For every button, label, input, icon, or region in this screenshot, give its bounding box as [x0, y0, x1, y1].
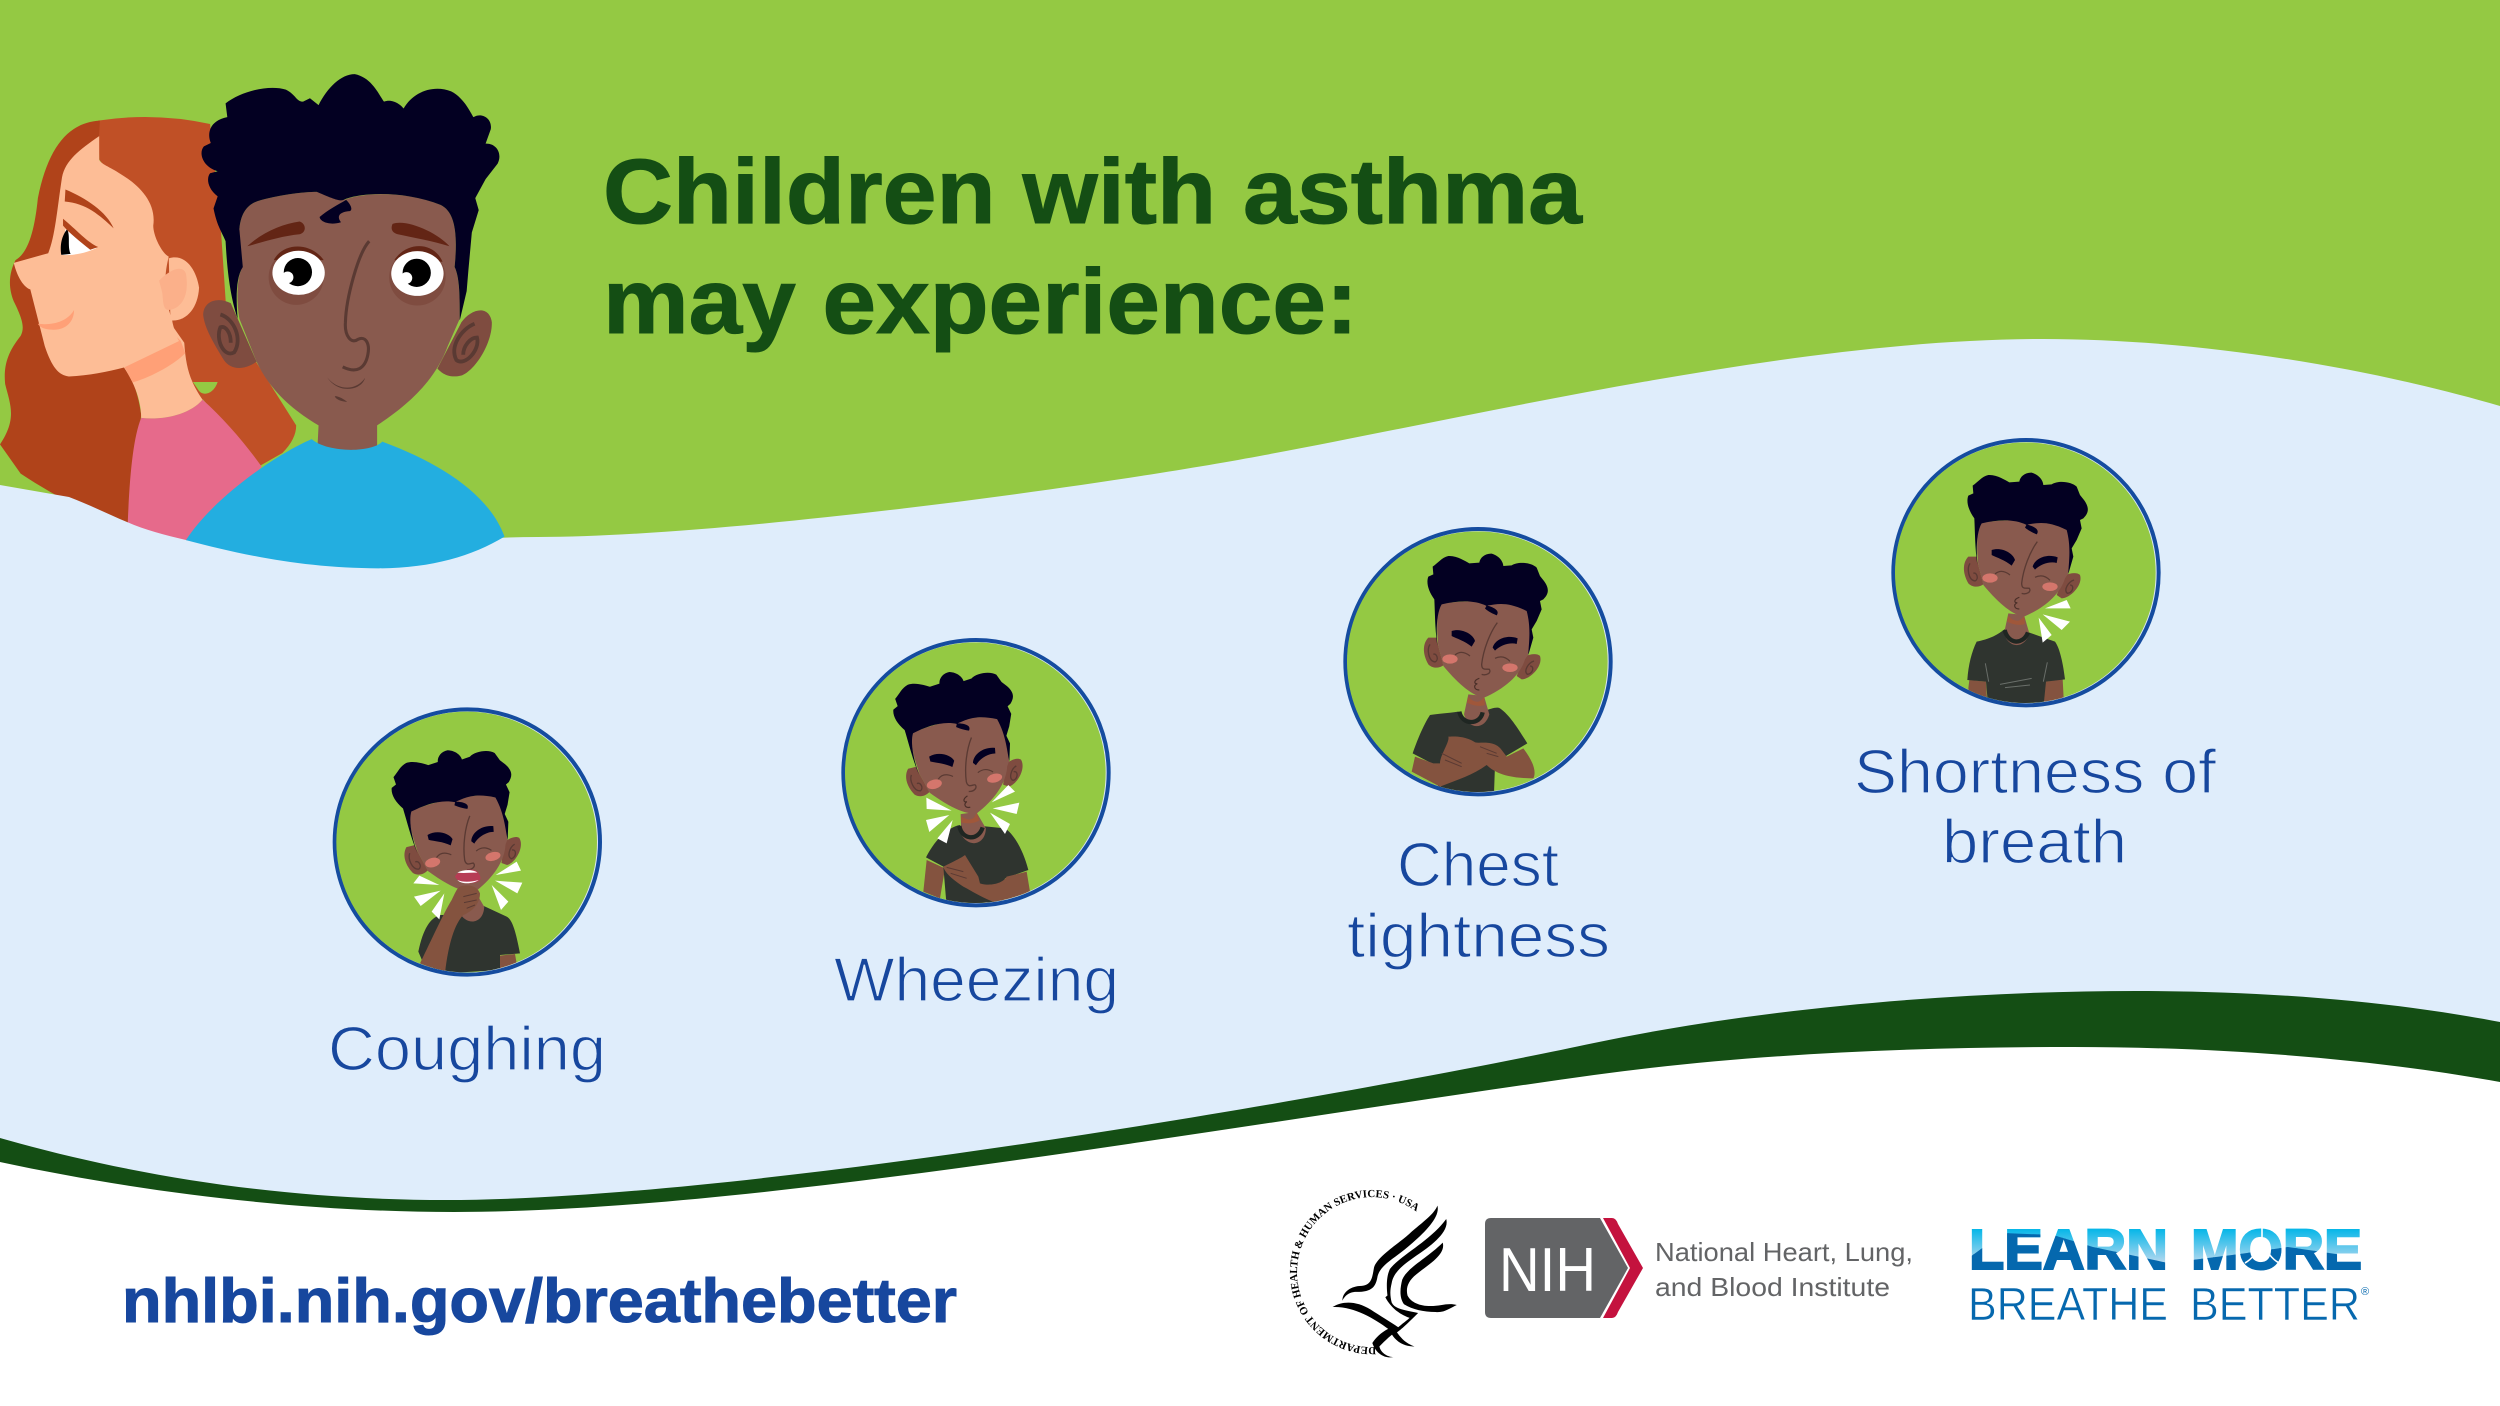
logo: NIH: [1485, 1218, 1913, 1318]
logo: NIH: National Heart, Lung,: [1655, 1237, 1913, 1267]
title: Children with asthma: [603, 141, 1583, 243]
logo: HHS seal: DEPARTMENT OF HEALTH & HUMAN SERVICES · USA: [1290, 1190, 1418, 1354]
logo: Learn More Breathe Better: BETTER: [2190, 1278, 2360, 1330]
logo: Learn More Breathe Better: MORE: [2191, 1218, 2362, 1282]
logo: Learn More Breathe Better: MORE: [2191, 1218, 2362, 1282]
boy illustration: [186, 74, 505, 568]
label: Shortness of breath: [1854, 738, 2217, 877]
dark green wave band: [0, 991, 2500, 1406]
green header background: [0, 0, 2500, 800]
logo: Learn More Breathe Better: BREATHE: [1968, 1278, 2168, 1330]
light blue wave panel: [0, 339, 2500, 1300]
icon: coughing boy: [335, 709, 600, 975]
label: Shortness of breath: Shortness of: [1854, 738, 2217, 807]
title: [603, 141, 1583, 353]
icon: shortness of breath boy: [1893, 440, 2159, 708]
icon: wheezing boy: [843, 640, 1109, 907]
label: Shortness of breath: breath: [1942, 808, 2127, 877]
logo: Learn More Breathe Better: [1972, 1228, 2369, 1320]
girl illustration: [0, 117, 296, 553]
label: Wheezing: Wheezing: [834, 946, 1119, 1015]
label: Chest tightness: [1347, 831, 1610, 971]
white footer: [0, 1047, 2500, 1406]
logo: Learn More Breathe Better: LEARN: [1969, 1218, 2168, 1282]
logo: NIH: and Blood Institute: [1655, 1272, 1890, 1302]
label: Chest tightness: tightness: [1347, 902, 1610, 971]
icon: chest tightness boy: [1345, 529, 1611, 794]
label: Chest tightness: Chest: [1397, 831, 1559, 900]
logo: NIH: NIH: [1499, 1236, 1596, 1305]
website link: nhlbi.nih.gov/breathebetter: [122, 1267, 957, 1336]
label: Coughing: Coughing: [328, 1015, 606, 1084]
logo: Learn More Breathe Better: ®: [2361, 1286, 2369, 1298]
logo: Learn More Breathe Better: LEARN: [1969, 1218, 2168, 1282]
title: may experience:: [603, 251, 1358, 353]
